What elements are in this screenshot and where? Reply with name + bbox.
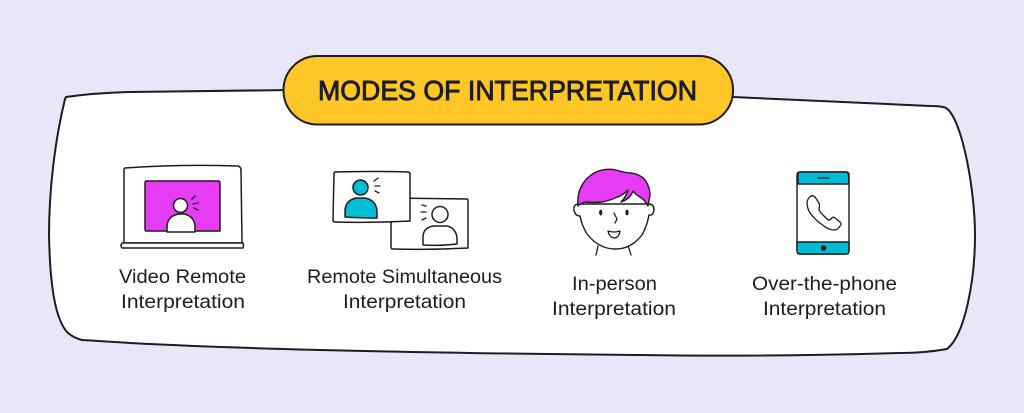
label: remote simultaneous: Remote Simultaneous <box>307 267 502 288</box>
title: MODES OF INTERPRETATION <box>318 75 697 106</box>
icon: two video windows <box>333 172 468 249</box>
label: over-the-phone: Over-the-phone <box>752 274 897 295</box>
label: interpretation: Interpretation <box>763 299 886 320</box>
item: video remote interpretation <box>119 165 246 313</box>
panel: modes container <box>49 90 975 356</box>
item: remote simultaneous interpretation <box>307 172 502 313</box>
label: interpretation: Interpretation <box>552 299 676 320</box>
icon: phone <box>797 172 849 254</box>
label: interpretation: Interpretation <box>343 292 466 313</box>
label: in-person: In-person <box>572 274 657 295</box>
label: interpretation: Interpretation <box>121 292 245 313</box>
icon: face <box>574 169 654 255</box>
icon: laptop <box>121 165 244 248</box>
item: in-person interpretation <box>552 169 676 320</box>
item: over-the-phone interpretation <box>752 172 897 320</box>
title badge <box>284 56 733 124</box>
label: video remote: Video Remote <box>119 267 246 288</box>
